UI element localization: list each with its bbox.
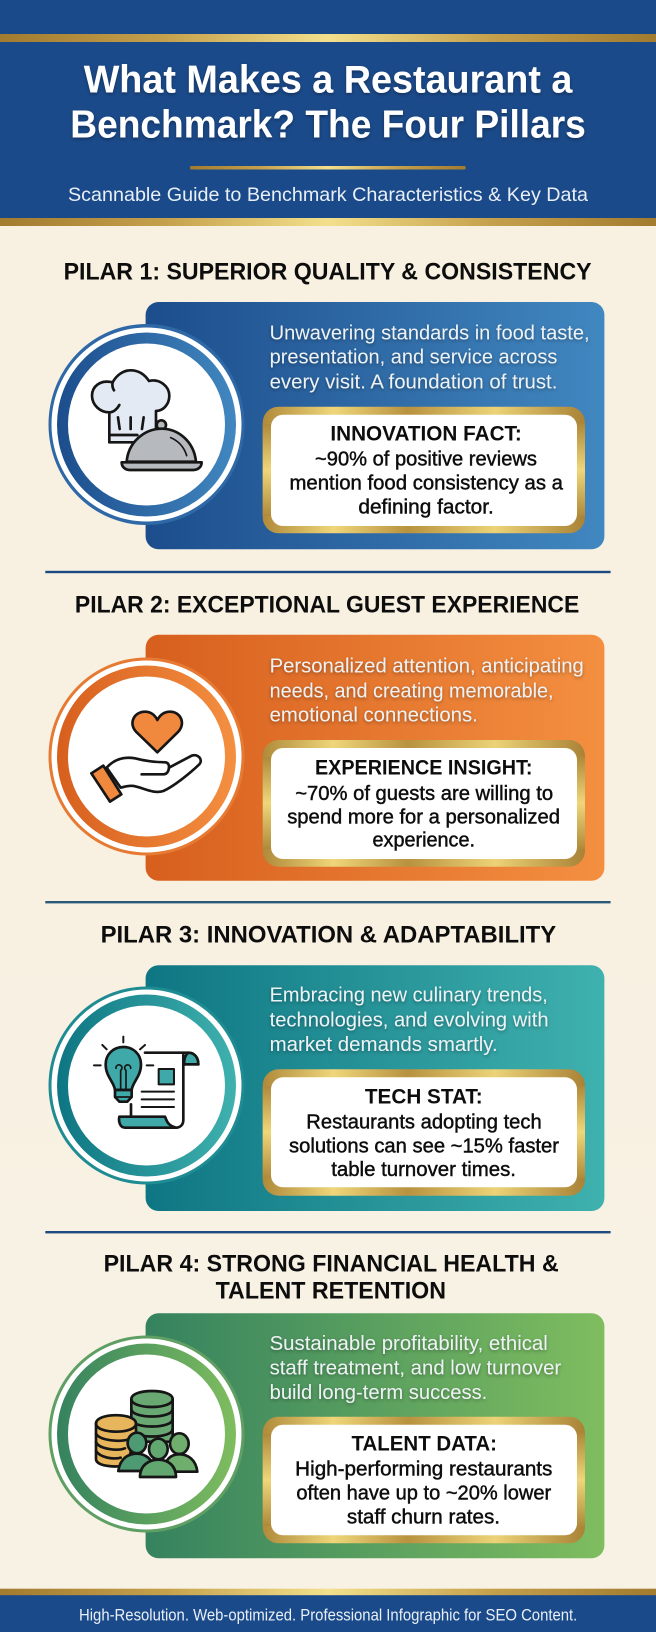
heading: pillar 4: PILAR 4: STRONG FINANCIAL HEALTH &: [104, 1251, 559, 1278]
fact box: pillar 2: EXPERIENCE INSIGHT:: [315, 756, 532, 780]
pillar 4: [48, 1251, 604, 1558]
badge: pillar 3: [48, 986, 244, 1184]
fact box: pillar 3: Restaurants adopting tech: [306, 1110, 542, 1133]
heading: pillar 3: PILAR 3: INNOVATION & ADAPTABILITY: [101, 921, 556, 948]
icon: chef hat and cloche: [92, 370, 202, 470]
description: pillar 3: market demands smartly.: [270, 1033, 498, 1056]
description: pillar 3: Embracing new culinary trends,: [270, 984, 548, 1007]
footer: [0, 1589, 656, 1632]
description: pillar 4: Sustainable profitability, ethical: [270, 1332, 548, 1355]
title: Benchmark? The Four Pillars: [70, 103, 586, 146]
icon: light bulb and scroll: [94, 1037, 198, 1128]
panel: pillar 4: [146, 1313, 604, 1558]
fact box: pillar 4: [263, 1417, 585, 1543]
description: pillar 3: [270, 984, 549, 1056]
icon: hand holding heart: [91, 712, 201, 802]
description: pillar 1: presentation, and service across: [270, 346, 557, 369]
badge: pillar 4: [48, 1336, 244, 1532]
badge: pillar 2: [48, 658, 244, 856]
description: pillar 4: staff treatment, and low turnover: [270, 1357, 561, 1380]
subtitle: Scannable Guide to Benchmark Characteristics & Key Data: [68, 184, 588, 206]
badge: pillar 1: [48, 324, 244, 525]
description: pillar 4: [270, 1332, 561, 1404]
description: pillar 2: emotional connections.: [270, 704, 478, 727]
description: pillar 2: [270, 654, 584, 727]
heading: pillar 4: [104, 1251, 559, 1304]
fact box: pillar 4: TALENT DATA:: [352, 1432, 497, 1456]
description: pillar 1: every visit. A foundation of trust.: [270, 370, 557, 393]
fact box: pillar 4: staff churn rates.: [347, 1505, 500, 1528]
pillar 3: [48, 921, 604, 1211]
description: pillar 2: needs, and creating memorable,: [270, 679, 554, 702]
panel: pillar 2: [146, 635, 604, 881]
pillar 1: [48, 258, 604, 549]
header banner: [0, 0, 656, 226]
heading: pillar 1: PILAR 1: SUPERIOR QUALITY & CONSISTENCY: [64, 258, 592, 285]
panel: pillar 3: [146, 965, 604, 1211]
heading: pillar 4: TALENT RETENTION: [216, 1277, 446, 1304]
description: pillar 3: technologies, and evolving with: [270, 1009, 549, 1032]
fact box: pillar 2: experience.: [372, 829, 475, 852]
fact box: pillar 3: table turnover times.: [331, 1158, 516, 1181]
fact box: pillar 1: defining factor.: [358, 495, 494, 518]
title: [70, 59, 586, 146]
footer: High-Resolution. Web-optimized. Professional Infographic for SEO Content.: [79, 1607, 577, 1625]
description: pillar 4: build long-term success.: [270, 1381, 487, 1404]
fact box: pillar 1: [263, 407, 585, 533]
fact box: pillar 2: ~70% of guests are willing to: [295, 782, 553, 805]
fact box: pillar 2: spend more for a personalized: [287, 805, 560, 828]
fact box: pillar 1: mention food consistency as a: [290, 471, 564, 494]
fact box: pillar 4: High-performing restaurants: [295, 1458, 552, 1481]
heading: pillar 2: PILAR 2: EXCEPTIONAL GUEST EXPERIENCE: [75, 591, 579, 618]
fact box: pillar 3: TECH STAT:: [365, 1084, 483, 1108]
fact box: pillar 2: [263, 740, 585, 867]
pillar 2: [48, 591, 604, 881]
title: What Makes a Restaurant a: [84, 59, 573, 102]
description: pillar 2: Personalized attention, anticipating: [270, 654, 584, 677]
description: pillar 1: Unwavering standards in food taste,: [270, 321, 590, 344]
fact box: pillar 4: often have up to ~20% lower: [296, 1481, 551, 1504]
description: pillar 1: [270, 321, 590, 393]
fact box: pillar 1: ~90% of positive reviews: [315, 448, 537, 471]
icon: coins and team: [96, 1391, 197, 1477]
fact box: pillar 3: solutions can see ~15% faster: [289, 1134, 559, 1157]
fact box: pillar 3: [263, 1069, 585, 1196]
fact box: pillar 1: INNOVATION FACT:: [330, 422, 522, 446]
panel: pillar 1: [146, 302, 604, 549]
